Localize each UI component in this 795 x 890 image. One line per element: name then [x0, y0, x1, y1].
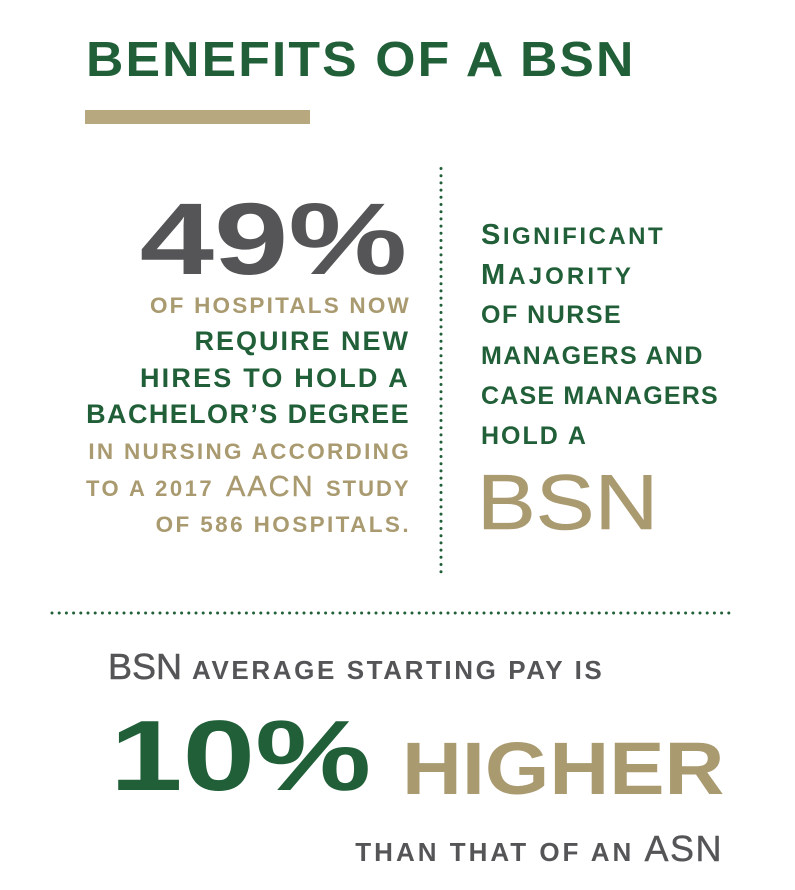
- title: BENEFITS OF A BSN: [86, 32, 636, 86]
- title underline: [85, 110, 310, 124]
- text block: hospitals requirement: OF 586 HOSPITALS.: [156, 512, 411, 536]
- text: average starting pay: BSN AVERAGE STARTING PAY IS: [108, 646, 604, 687]
- text block: hospitals requirement: STUDY: [326, 476, 411, 501]
- text block: nurse managers: OF NURSE: [481, 301, 622, 329]
- statistic: 49 percent: 49%: [140, 182, 407, 296]
- statistic: 10 percent: 10%: [110, 700, 371, 812]
- text block: hospitals requirement: BACHELOR’S DEGREE: [86, 399, 410, 429]
- large BSN: BSN: [477, 458, 658, 546]
- vertical dotted divider: [440, 167, 442, 574]
- text block: hospitals requirement: AACN: [226, 471, 315, 503]
- text block: hospitals requirement: IN NURSING ACCORDING: [88, 439, 411, 464]
- text block: nurse managers: CASE MANAGERS: [481, 382, 719, 410]
- text block: nurse managers: HOLD A: [481, 422, 588, 450]
- text block: hospitals requirement: OF HOSPITALS NOW: [150, 292, 411, 318]
- text block: nurse managers: MAJORITY: [481, 259, 634, 291]
- text block: nurse managers: [477, 219, 719, 546]
- text block: nurse managers: MANAGERS AND: [481, 342, 704, 370]
- text block: hospitals requirement: [86, 292, 411, 536]
- text block: hospitals requirement: TO A 2017: [86, 476, 214, 501]
- horizontal dotted divider: [50, 612, 730, 614]
- text block: nurse managers: SIGNIFICANT: [481, 219, 665, 251]
- text block: hospitals requirement: REQUIRE NEW: [194, 326, 410, 356]
- text: higher: HIGHER: [402, 727, 724, 810]
- text block: hospitals requirement: HIRES TO HOLD A: [140, 363, 410, 393]
- text: than that of an ASN: THAN THAT OF AN ASN: [355, 828, 723, 869]
